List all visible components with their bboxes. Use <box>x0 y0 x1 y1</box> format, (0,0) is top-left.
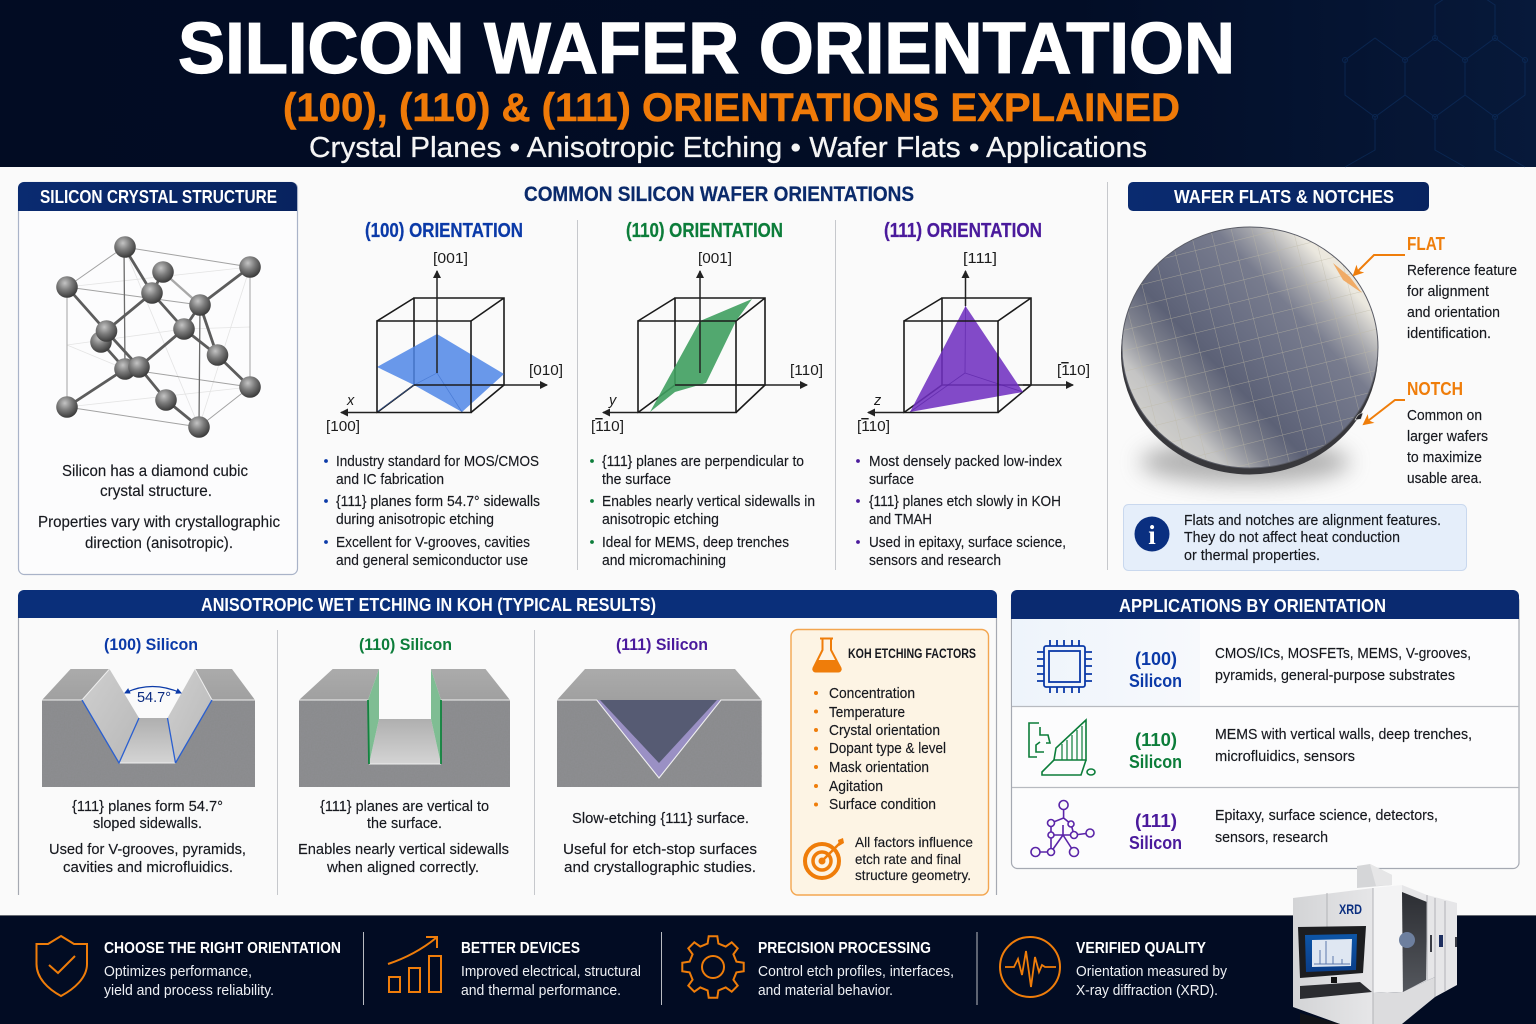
(110) bullet list <box>590 454 815 569</box>
(111) applications text: sensors, research <box>1215 830 1328 846</box>
(111) caption: and crystallographic studies. <box>564 860 756 876</box>
benefit text: PRECISION PROCESSING <box>758 940 931 957</box>
(110) applications text: microfluidics, sensors <box>1215 749 1355 765</box>
panel heading <box>1011 590 1519 619</box>
icon: flask <box>813 638 841 672</box>
column: (110) silicon etch <box>298 635 510 876</box>
(100) silicon label: (100) Silicon <box>104 635 198 654</box>
KOH etching factors box <box>791 630 988 895</box>
row: (110) applications <box>1029 720 1472 775</box>
crystal description text: direction (anisotropic). <box>85 535 233 552</box>
icon: diffraction signal <box>1000 937 1060 997</box>
(110) crystal cube diagram: [110] <box>790 363 823 379</box>
panel heading: APPLICATIONS BY ORIENTATION <box>1119 596 1386 616</box>
benefit text: and material behavior. <box>758 983 893 999</box>
column: (110) orientation <box>590 220 823 569</box>
(100) silicon tag <box>1129 649 1182 691</box>
(110) caption: the surface. <box>367 816 442 832</box>
(110) bullet list: {111} planes are perpendicular to <box>602 454 804 470</box>
subtitle: (100), (110) & (111) ORIENTATIONS EXPLAINED <box>283 86 1180 130</box>
(100) silicon tag: (100) <box>1135 649 1177 669</box>
(111) bullet list: surface <box>869 472 914 488</box>
(100) bullet list: Industry standard for MOS/CMOS <box>336 454 539 470</box>
(110) crystal cube diagram: [110] <box>591 419 624 435</box>
panel heading <box>18 590 997 618</box>
(110) bullet list: Ideal for MEMS, deep trenches <box>602 535 789 551</box>
panel heading: SILICON CRYSTAL STRUCTURE <box>40 187 277 207</box>
(100) caption: sloped sidewalls. <box>93 816 202 832</box>
(110) crystal cube diagram <box>591 251 823 435</box>
benefit text: Control etch profiles, interfaces, <box>758 964 954 980</box>
(100) caption: cavities and microfluidics. <box>63 860 233 876</box>
column: (100) silicon etch <box>42 635 255 876</box>
benefit text: CHOOSE THE RIGHT ORIENTATION <box>104 940 341 957</box>
factors title: KOH ETCHING FACTORS <box>848 646 976 661</box>
benefit text: VERIFIED QUALITY <box>1076 940 1207 957</box>
(100) caption: {111} planes form 54.7° <box>72 799 223 815</box>
panel: common silicon wafer orientations <box>324 182 1108 570</box>
flat callout: FLAT <box>1407 234 1445 254</box>
panel heading <box>1128 182 1429 211</box>
factors list: Crystal orientation <box>829 723 940 739</box>
row: (111) applications <box>1031 800 1438 856</box>
flat callout: identification. <box>1407 326 1491 342</box>
crystal description text: Properties vary with crystallographic <box>38 514 280 531</box>
benefit text: Optimizes performance, <box>104 964 252 980</box>
flat callout <box>1354 234 1517 342</box>
XRD instrument illustration: XRD <box>1339 901 1362 917</box>
(111) silicon tag: (111) <box>1135 811 1177 831</box>
factors list: Mask orientation <box>829 760 929 776</box>
notch callout: larger wafers <box>1407 429 1488 445</box>
hexagon network pattern <box>1342 0 1528 167</box>
(111) applications text <box>1215 808 1438 846</box>
icon: molecular lattice <box>1031 800 1094 856</box>
icon: target <box>805 838 844 878</box>
crystal description text <box>38 463 280 552</box>
factors list: Agitation <box>829 779 883 795</box>
info callout: or thermal properties. <box>1184 548 1320 564</box>
icon: gear <box>682 936 744 998</box>
row: (100) applications <box>1037 640 1471 693</box>
header banner <box>0 0 1536 167</box>
notch callout: to maximize <box>1407 450 1482 466</box>
(110) bullet list: the surface <box>602 472 671 488</box>
(111) bullet list: {111} planes etch slowly in KOH <box>869 494 1061 510</box>
factors note: structure geometry. <box>855 867 971 883</box>
factors note: etch rate and final <box>855 851 961 867</box>
(110) silicon tag: (110) <box>1135 730 1177 750</box>
section heading: COMMON SILICON WAFER ORIENTATIONS <box>524 182 914 206</box>
(111) crystal cube diagram: [111] <box>963 251 997 267</box>
V-groove etch profile <box>42 669 255 787</box>
vertical trench etch profile <box>299 669 510 787</box>
flat callout: Reference feature <box>1407 263 1517 279</box>
(111) bullet list: Most densely packed low-index <box>869 454 1063 470</box>
benefit text <box>461 940 641 999</box>
(111) silicon label: (111) Silicon <box>616 635 708 654</box>
icon: shield <box>36 936 87 996</box>
column: (111) silicon etch <box>557 635 762 876</box>
(110) caption: {111} planes are vertical to <box>320 799 489 815</box>
triangular pit etch profile <box>557 669 762 787</box>
info callout <box>1124 504 1466 570</box>
flat callout: and orientation <box>1407 305 1500 321</box>
(110) crystal cube diagram: [001] <box>698 251 732 267</box>
(110) bullet list: Enables nearly vertical sidewalls in <box>602 494 815 510</box>
(111) crystal cube diagram: [110] <box>1057 363 1090 379</box>
benefit: better devices <box>388 937 641 999</box>
flat callout: for alignment <box>1407 284 1489 300</box>
(100) bullet list: Excellent for V-grooves, cavities <box>336 535 530 551</box>
icon: info: i <box>1148 520 1156 550</box>
(111) bullet list: and TMAH <box>869 512 932 528</box>
benefit text: yield and process reliability. <box>104 983 274 999</box>
panel: wafer flats and notches <box>1121 182 1517 570</box>
icon: rising bar chart <box>388 937 441 992</box>
wafer illustration <box>1121 227 1378 484</box>
column dividers <box>578 182 1108 570</box>
footer band <box>0 915 1536 1024</box>
(111) bullet list <box>856 454 1066 569</box>
panel heading: WAFER FLATS & NOTCHES <box>1174 187 1394 207</box>
(100) crystal cube diagram: [010] <box>529 363 563 379</box>
benefit text <box>1076 940 1228 999</box>
panel: anisotropic wet etching <box>18 590 997 895</box>
(100) bullet list: {111} planes form 54.7° sidewalls <box>336 494 540 510</box>
crystal description text: crystal structure. <box>100 483 212 500</box>
(111) caption: Slow-etching {111} surface. <box>572 811 749 827</box>
crystal description text: Silicon has a diamond cubic <box>62 463 248 480</box>
V-groove etch profile: 54.7° <box>137 689 171 706</box>
(110) applications text: MEMS with vertical walls, deep trenches, <box>1215 727 1472 743</box>
panel heading <box>18 182 297 211</box>
(100) crystal cube diagram: [100] <box>326 419 360 435</box>
column: (100) orientation <box>324 220 563 569</box>
(100) applications text: CMOS/ICs, MOSFETs, MEMS, V-grooves, <box>1215 646 1471 662</box>
(111) silicon tag <box>1129 811 1182 853</box>
benefit: choose the right orientation <box>36 936 341 999</box>
XRD instrument illustration <box>1293 864 1457 1024</box>
factors note: All factors influence <box>855 834 973 850</box>
(100) crystal cube diagram: x <box>346 393 355 409</box>
(110) crystal cube diagram: y <box>608 393 617 409</box>
factors note <box>855 834 973 883</box>
(110) bullet list: anisotropic etching <box>602 512 719 528</box>
(111) crystal cube diagram: z <box>873 393 882 409</box>
(100) bullet list <box>324 454 540 569</box>
notch callout: Common on <box>1407 408 1482 424</box>
benefit: precision processing <box>682 936 954 999</box>
icon: microchip <box>1037 640 1092 693</box>
(111) caption: Useful for etch-stop surfaces <box>563 842 757 858</box>
benefit text: Orientation measured by <box>1076 964 1228 980</box>
(110) heading: (110) ORIENTATION <box>626 220 783 242</box>
(111) crystal cube diagram <box>857 251 1090 435</box>
panel heading: ANISOTROPIC WET ETCHING IN KOH (TYPICAL RESULTS) <box>201 595 656 615</box>
benefit text: X-ray diffraction (XRD). <box>1076 983 1218 999</box>
icon: MEMS instrument <box>1029 720 1095 775</box>
factors list: Surface condition <box>829 797 936 813</box>
(100) crystal cube diagram <box>326 251 563 435</box>
diamond cubic crystal model <box>56 236 261 438</box>
(111) caption <box>563 811 757 876</box>
title: SILICON WAFER ORIENTATION <box>178 9 1235 89</box>
notch callout: NOTCH <box>1407 379 1463 399</box>
notch callout: usable area. <box>1407 471 1482 487</box>
panel: silicon crystal structure <box>18 182 298 574</box>
info callout: Flats and notches are alignment features. <box>1184 513 1441 529</box>
(100) bullet list: and IC fabrication <box>336 472 444 488</box>
(100) crystal cube diagram: [001] <box>433 251 468 267</box>
factors list: Concentration <box>829 686 915 702</box>
factors list: Dopant type & level <box>829 741 946 757</box>
(110) applications text <box>1215 727 1472 765</box>
(111) applications text: Epitaxy, surface science, detectors, <box>1215 808 1438 824</box>
(110) silicon tag: Silicon <box>1129 752 1182 772</box>
info callout: They do not affect heat conduction <box>1184 530 1400 546</box>
(100) bullet list: during anisotropic etching <box>336 512 494 528</box>
(100) silicon tag: Silicon <box>1129 671 1182 691</box>
topic line: Crystal Planes • Anisotropic Etching • Wafer Flats • Applications <box>309 132 1147 164</box>
benefit text <box>104 940 341 999</box>
column: (111) orientation <box>856 220 1090 569</box>
(100) applications text <box>1215 646 1471 684</box>
(111) heading: (111) ORIENTATION <box>884 220 1042 242</box>
(110) silicon label: (110) Silicon <box>359 635 452 654</box>
benefit: verified quality <box>1000 937 1228 999</box>
notch callout <box>1364 379 1488 487</box>
factors list <box>814 686 946 813</box>
(100) caption: Used for V-grooves, pyramids, <box>49 842 246 858</box>
icon: info <box>1134 516 1170 552</box>
benefit text: Improved electrical, structural <box>461 964 641 980</box>
(110) bullet list: and micromachining <box>602 553 726 569</box>
benefit text <box>758 940 954 999</box>
(110) silicon tag <box>1129 730 1182 772</box>
(100) applications text: pyramids, general-purpose substrates <box>1215 668 1455 684</box>
benefit text: BETTER DEVICES <box>461 940 580 957</box>
factors list: Temperature <box>829 705 905 721</box>
(111) bullet list: sensors and research <box>869 553 1001 569</box>
(110) caption: when aligned correctly. <box>326 860 479 876</box>
(100) heading: (100) ORIENTATION <box>365 220 523 242</box>
(110) caption: Enables nearly vertical sidewalls <box>298 842 509 858</box>
(111) silicon tag: Silicon <box>1129 833 1182 853</box>
panel: applications by orientation <box>1011 590 1519 868</box>
benefit text: and thermal performance. <box>461 983 621 999</box>
(100) bullet list: and general semiconductor use <box>336 553 528 569</box>
(110) caption <box>298 799 509 876</box>
(100) caption <box>49 799 246 876</box>
(111) bullet list: Used in epitaxy, surface science, <box>869 535 1066 551</box>
(111) crystal cube diagram: [110] <box>857 419 890 435</box>
